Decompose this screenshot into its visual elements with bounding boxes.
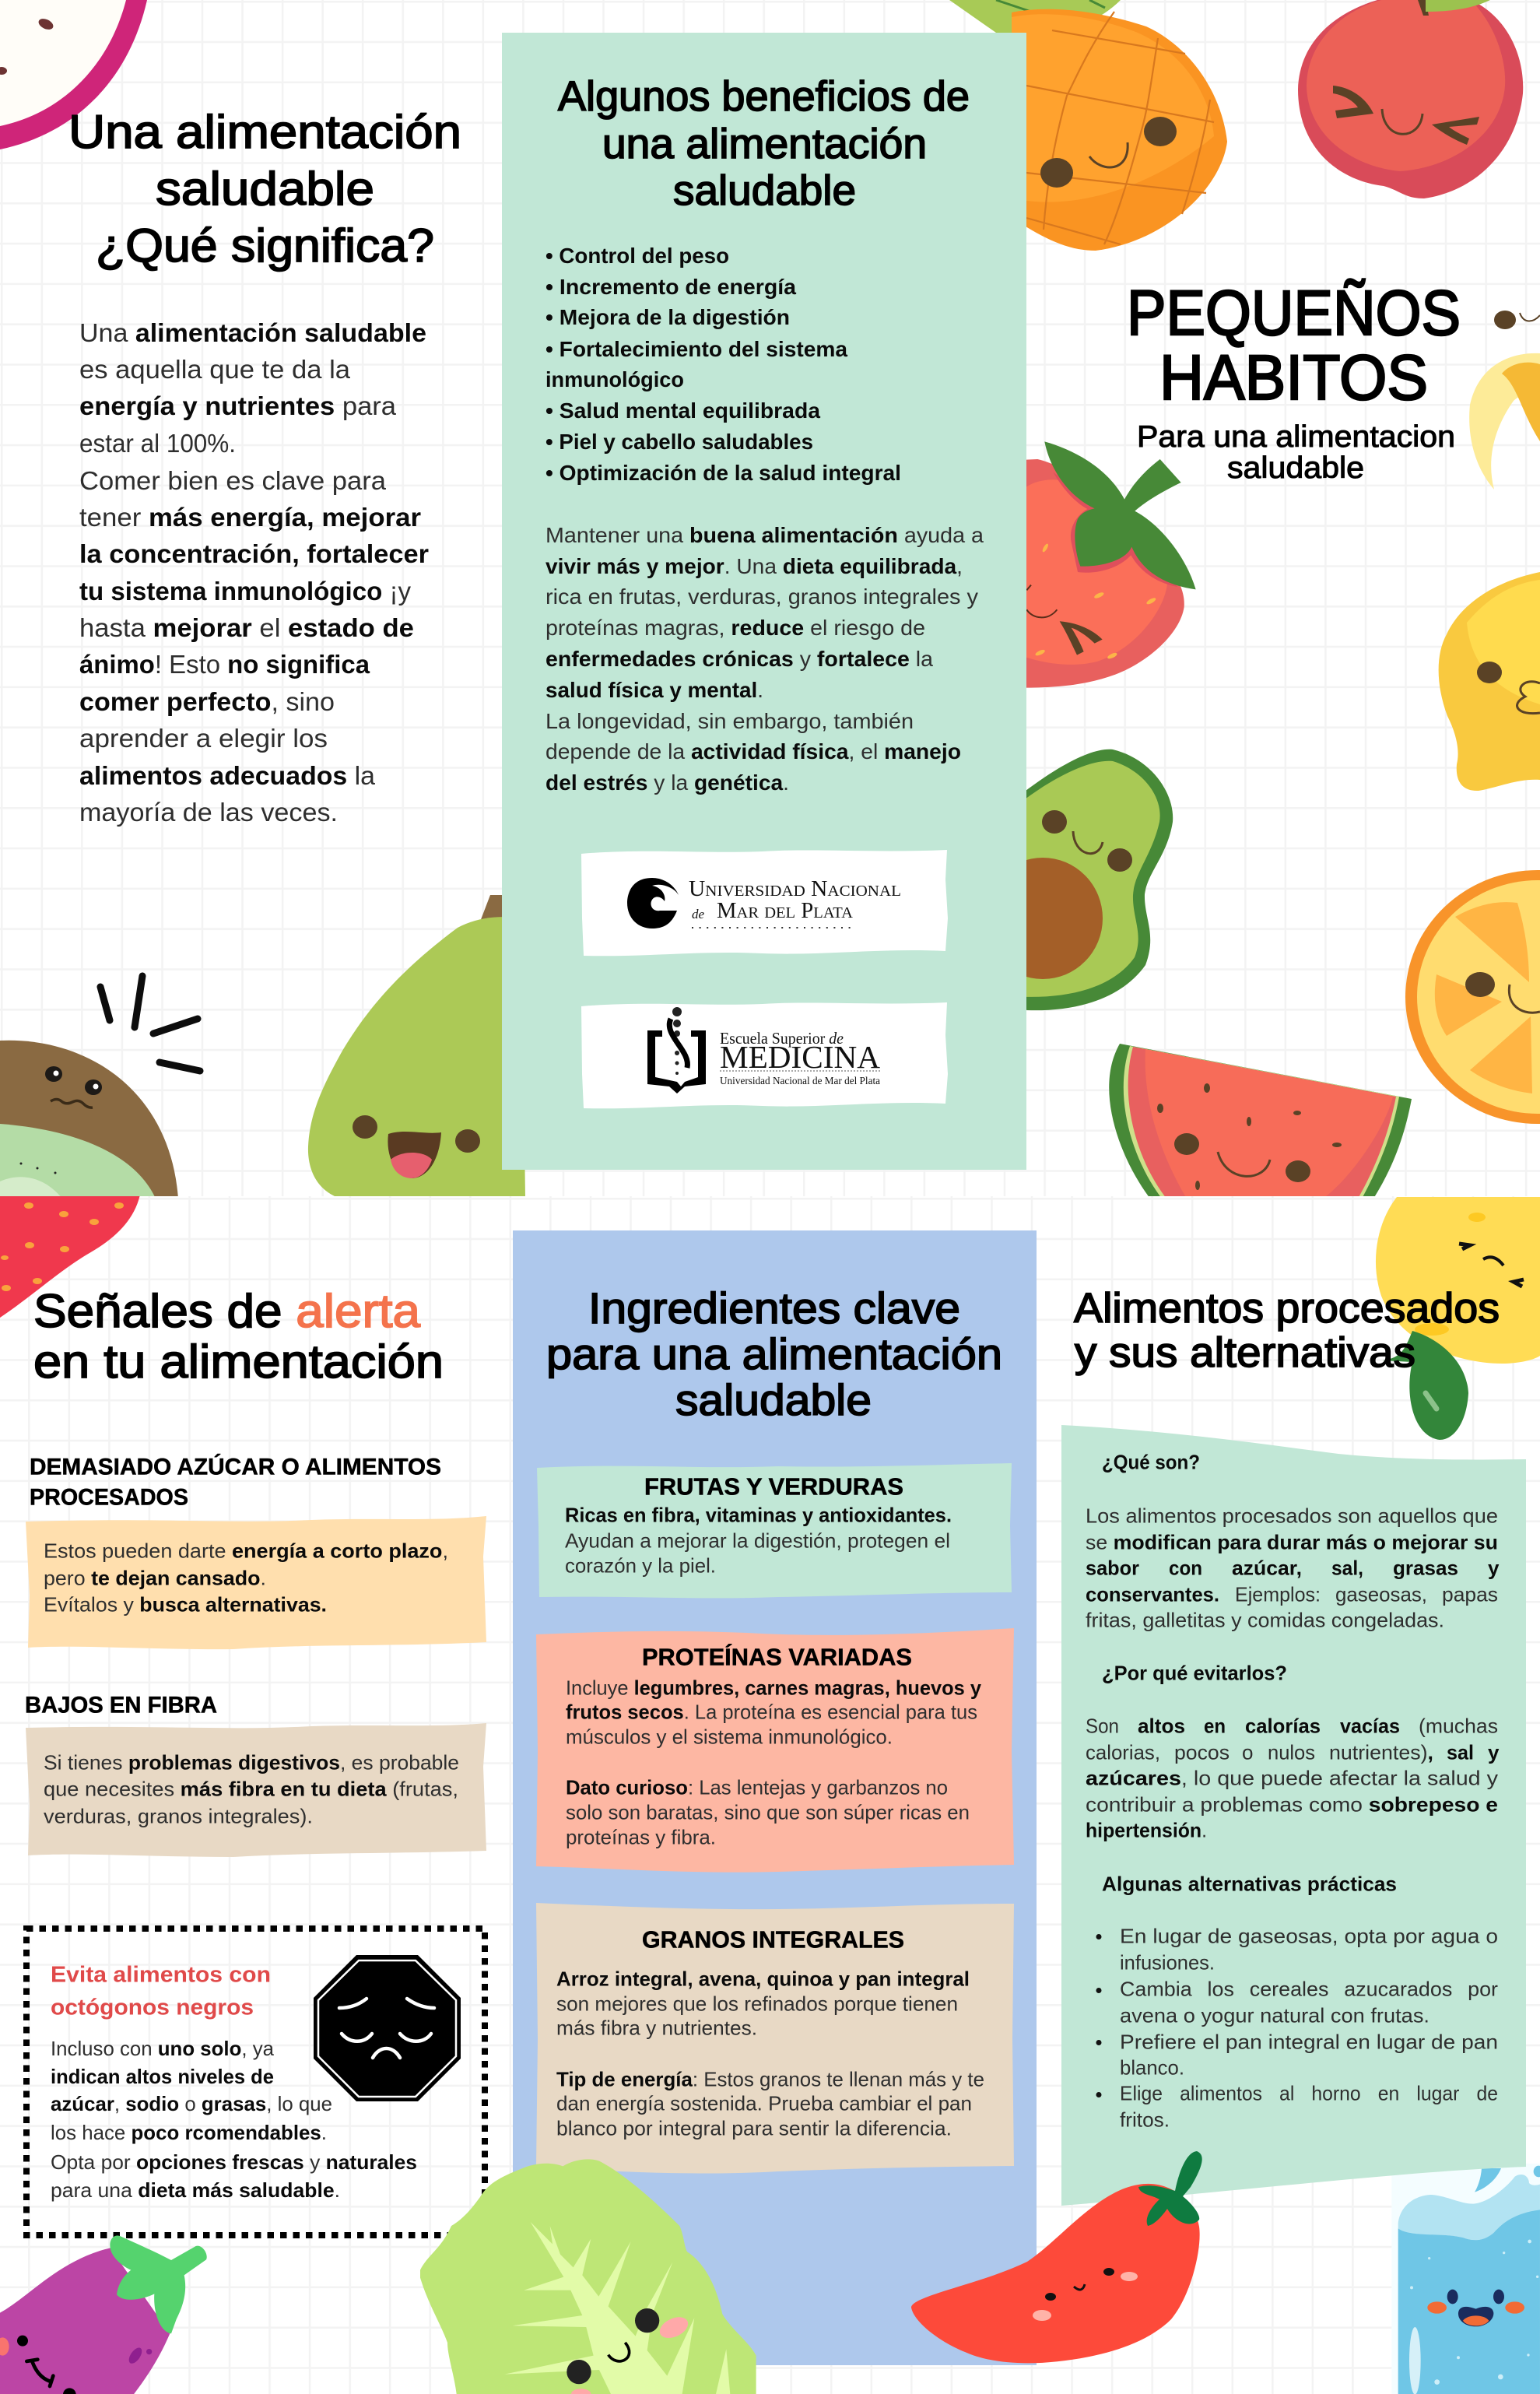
callout: fiber: que necesites más fibra en tu dieta (frutas, [44, 1778, 458, 1801]
list: benefits [545, 244, 901, 485]
icon: peeking face [1494, 311, 1540, 329]
text block: why avoid: hipertensión. [1086, 1818, 1207, 1841]
heading: benefits [558, 73, 970, 214]
text block: what are they: Los alimentos procesados son aquellos que [1086, 1504, 1498, 1527]
text block: why avoid: pocos [1174, 1740, 1230, 1764]
card: whole grains: Tip de energía: Estos granos te llenan más y te [556, 2067, 984, 2090]
icon: surprise lines [100, 976, 200, 1071]
icon: strawberry [1009, 441, 1196, 688]
text block: why avoid: y [1488, 1740, 1500, 1764]
heading: una alimentación saludable [68, 106, 461, 272]
callout: sugar [26, 1516, 486, 1649]
text block: what are they: se modifican para durar más o mejorar su [1086, 1530, 1498, 1553]
subheading: demasiado azúcar [30, 1454, 441, 1510]
text block: what are they: azúcar, [1232, 1557, 1302, 1580]
title: pequeños habitos [1127, 278, 1461, 485]
text block: why avoid: calorias, [1086, 1740, 1160, 1764]
card: whole grains: blanco por integral para sentir la diferencia. [556, 2117, 952, 2140]
subheading: demasiado azúcar: DEMASIADO AZÚCAR O ALIMENTOS [30, 1454, 441, 1480]
logo: Universidad Nacional de Mar del Plata: Mar del Plata [717, 899, 854, 923]
icon: banana [1469, 353, 1540, 490]
icon: chili pepper [911, 2151, 1202, 2363]
panel: benefits [502, 33, 1026, 1170]
subheading: what are they: ¿Qué son? [1102, 1451, 1200, 1474]
text block: why avoid: o [1242, 1740, 1253, 1764]
card: fruits and vegetables: Ayudan a mejorar la digestión, protegen el [565, 1529, 950, 1552]
callout: fiber [26, 1723, 486, 1857]
heading: benefits: Algunos beneficios de [558, 73, 970, 120]
icon: dragon fruit [0, 0, 147, 149]
icon: sad octagon [314, 1955, 461, 2101]
icon: apple [1298, 0, 1523, 198]
card: proteins: Incluye legumbres, carnes magras, huevos y [566, 1676, 982, 1700]
icon: watermelon [1109, 1044, 1412, 1199]
list: benefits: inmunológico [545, 367, 684, 391]
icon: lemon with leaf [1376, 1197, 1540, 1440]
text block: what are they: sal, [1331, 1557, 1363, 1580]
text block: definition: energía y nutrientes para [79, 391, 397, 420]
heading: key ingredients: Ingredientes clave [588, 1283, 960, 1332]
text block: benefits paragraph: salud física y mental. [545, 678, 763, 702]
text block: benefits paragraph: enfermedades crónicas y fortalece la [545, 647, 933, 671]
logo: Escuela Superior de Medicina [581, 1002, 948, 1108]
text block: what are they: conservantes. [1086, 1583, 1219, 1606]
icon: kiwi [0, 1041, 178, 1199]
warning heading: Evita alimentos con [51, 1963, 271, 1988]
card: fruits and vegetables: Ricas en fibra, vitaminas y antioxidantes. [565, 1504, 952, 1527]
text block: definition: tu sistema inmunológico ¡y [79, 577, 411, 606]
list: benefits: • Piel y cabello saludables [545, 430, 813, 454]
subheading: bajos en fibra: BAJOS EN FIBRA [25, 1692, 217, 1718]
warning text: indican altos niveles de [51, 2065, 274, 2088]
heading: una alimentación saludable: ¿Qué significa? [96, 219, 434, 272]
card: proteins: músculos y el sistema inmunológico. [566, 1725, 893, 1748]
list: alternatives: Cambia los cereales azucarados por [1120, 1977, 1498, 2000]
warning text: los hace poco rcomendables. [51, 2121, 327, 2144]
warning text: azúcar, sodio o grasas, lo que [51, 2092, 332, 2115]
list: alternatives: Prefiere el pan integral en lugar de pan [1120, 2030, 1498, 2053]
icon: lettuce [420, 2159, 756, 2394]
logo: Universidad Nacional de Mar del Plata: de [692, 907, 705, 921]
card: whole grains: GRANOS INTEGRALES [642, 1925, 904, 1953]
card: whole grains: son mejores que los refinados porque tienen [556, 1992, 958, 2016]
text block: why avoid: azúcares , lo que puede afectar la salud y [1086, 1767, 1498, 1790]
card: fruits and vegetables: corazón y la piel. [565, 1553, 716, 1577]
text block: benefits paragraph: del estrés y la genética. [545, 771, 789, 795]
text block: definition: comer perfecto, sino [79, 687, 335, 716]
icon: water glass [1391, 2164, 1540, 2394]
logo: Escuela Superior de Medicina: MEDICINA [720, 1039, 880, 1075]
list: alternatives [1096, 1924, 1498, 2131]
text block: what are they: papas [1442, 1583, 1498, 1606]
list: alternatives: infusiones. [1120, 1950, 1215, 1974]
subtitle: saludable [1227, 451, 1364, 485]
card: proteins: frutos secos. La proteína es esencial para tus [566, 1700, 977, 1723]
icon: pear [308, 895, 525, 1196]
text block: definition: es aquella que te da la [79, 355, 351, 384]
text block: why avoid: (muchas [1419, 1714, 1498, 1737]
text block: definition: tener más energía, mejorar [79, 503, 421, 532]
text block: what are they: con [1169, 1557, 1202, 1580]
card: fruits and vegetables: FRUTAS Y VERDURAS [644, 1473, 903, 1501]
title: pequeños habitos: PEQUEÑOS [1127, 278, 1461, 349]
subtitle: Para una alimentacion [1137, 420, 1455, 454]
text block: definition: alimentos adecuados la [79, 761, 376, 790]
logo: Escuela Superior de Medicina: Escuela Superior de [720, 1029, 844, 1048]
list: benefits: • Optimización de la salud integral [545, 461, 901, 485]
logo: Universidad Nacional de Mar del Plata [581, 850, 948, 956]
card: proteins: solo son baratas, sino que son súper ricas en [566, 1801, 970, 1824]
text block: what are they [1086, 1504, 1500, 1631]
text block: why avoid: contribuir a problemas como sobrepeso e [1086, 1793, 1498, 1817]
list: benefits: • Incremento de energía [545, 275, 796, 299]
callout: sugar: Evítalos y busca alternativas. [44, 1592, 327, 1616]
text block: why avoid: vacías [1340, 1714, 1400, 1737]
text block: benefits paragraph: Mantener una buena alimentación ayuda a [545, 523, 984, 547]
text block: definition: Comer bien es clave para [79, 466, 387, 495]
text block: definition: ánimo! Esto no significa [79, 650, 370, 679]
text block: definition: mayoría de las veces. [79, 798, 338, 827]
icon: avocado [1026, 749, 1173, 1010]
warning text: Incluso con uno solo, ya [51, 2037, 275, 2060]
panel: processed foods [1061, 1425, 1526, 2206]
text block: benefits paragraph [545, 523, 984, 795]
warning text [51, 2037, 417, 2202]
warning text: Opta por opciones frescas y naturales [51, 2150, 417, 2174]
list: benefits: • Mejora de la digestión [545, 305, 790, 329]
icon: lemon [1439, 572, 1540, 791]
heading: una alimentación saludable: saludable [156, 163, 374, 215]
callout: fiber: Si tienes problemas digestivos, es probable [44, 1751, 459, 1774]
text block: why avoid: Son [1086, 1714, 1119, 1737]
card: proteins: PROTEÍNAS VARIADAS [642, 1644, 912, 1670]
text block: what are they: y [1488, 1557, 1500, 1580]
text block: what are they: fritas, galletitas y comidas congeladas. [1086, 1608, 1444, 1631]
warning heading [51, 1963, 271, 2020]
list: alternatives: En lugar de gaseosas, opta por agua o [1120, 1924, 1498, 1947]
heading: key ingredients: para una alimentación [546, 1329, 1002, 1378]
heading: processed foods: Alimentos procesados [1074, 1285, 1500, 1332]
subheading: demasiado azúcar: PROCESADOS [30, 1485, 188, 1510]
card: fruits and vegetables [537, 1463, 1012, 1598]
list: alternatives: avena o yogur natural con frutas. [1120, 2003, 1429, 2027]
warning text: para una dieta más saludable. [51, 2178, 340, 2202]
text block: definition: hasta mejorar el estado de [79, 613, 414, 642]
heading: señales de alerta: en tu alimentación [33, 1336, 444, 1388]
text block: why avoid: en [1204, 1714, 1226, 1737]
logo: Universidad Nacional de Mar del Plata: Universidad Nacional [689, 877, 901, 901]
subheading: why avoid: ¿Por qué evitarlos? [1102, 1661, 1287, 1684]
text block: what are they: Ejemplos: [1235, 1583, 1321, 1606]
text block: why avoid: sal [1447, 1740, 1474, 1764]
list: alternatives: fritos. [1120, 2108, 1170, 2131]
icon: eggplant [0, 2235, 207, 2394]
title: pequeños habitos: HABITOS [1159, 342, 1428, 413]
heading: key ingredients: saludable [675, 1375, 872, 1424]
card: proteins: proteínas y fibra. [566, 1826, 716, 1849]
text block: benefits paragraph: La longevidad, sin embargo, también [545, 709, 914, 733]
text block: why avoid [1086, 1714, 1500, 1841]
warning heading: octógonos negros [51, 1996, 254, 2020]
subheading: alternatives: Algunas alternativas prácticas [1102, 1873, 1397, 1896]
text block: benefits paragraph: proteínas magras, reduce el riesgo de [545, 616, 925, 640]
card: whole grains: dan energía sostenida. Prueba cambiar el pan [556, 2092, 972, 2115]
card: proteins [536, 1628, 1014, 1873]
text block: what are they: grasas [1393, 1557, 1458, 1580]
list: benefits: • Salud mental equilibrada [545, 398, 820, 423]
text block: definition: estar al 100%. [79, 429, 236, 458]
heading: una alimentación saludable: Una alimentación [68, 106, 461, 158]
card: whole grains: Arroz integral, avena, quinoa y pan integral [556, 1968, 970, 1991]
heading: processed foods: y sus alternativas [1075, 1329, 1415, 1376]
text block: definition [79, 318, 429, 827]
logo: Escuela Superior de Medicina: Universidad Nacional de Mar del Plata [720, 1076, 881, 1087]
subtitle [1137, 420, 1455, 485]
callout: sugar: pero te dejan cansado. [44, 1566, 266, 1589]
text block: why avoid: nutrientes), [1329, 1740, 1433, 1764]
text block: why avoid: altos [1138, 1714, 1185, 1737]
text block: what are they: gaseosas, [1335, 1583, 1427, 1606]
panel: key ingredients [513, 1230, 1037, 2365]
card: whole grains: más fibra y nutrientes. [556, 2016, 757, 2039]
text block: benefits paragraph: vivir más y mejor. Una dieta equilibrada, [545, 554, 963, 578]
heading: processed foods [1074, 1285, 1500, 1376]
callout: black octagons warning [26, 1929, 485, 2235]
heading: benefits: saludable [673, 167, 856, 214]
callout: sugar: Estos pueden darte energía a corto plazo , [44, 1539, 448, 1563]
callout: fiber: verduras, granos integrales). [44, 1804, 313, 1827]
icon: pineapple [949, 0, 1227, 251]
heading: señales de alerta: Señales de alerta [33, 1285, 421, 1337]
icon: strawberry corner [0, 1191, 141, 1318]
heading: señales de alerta [33, 1285, 444, 1388]
text block: definition: aprender a elegir los [79, 724, 328, 753]
text block: why avoid: nulos [1268, 1740, 1315, 1764]
text block: definition: Una alimentación saludable [79, 318, 426, 347]
heading: key ingredients [546, 1283, 1002, 1424]
icon: orange slice [1405, 870, 1540, 1124]
text block: benefits paragraph: depende de la actividad física, el manejo [545, 739, 961, 763]
card: proteins: Dato curioso: Las lentejas y garbanzos no [566, 1776, 948, 1799]
list: alternatives: blanco. [1120, 2056, 1184, 2080]
list: benefits: • Control del peso [545, 244, 729, 268]
text block: what are they: sabor [1086, 1557, 1139, 1580]
list: alternatives: Elige alimentos al horno en lugar de [1120, 2081, 1498, 2104]
text block: benefits paragraph: rica en frutas, verduras, granos integrales y [545, 584, 978, 609]
list: benefits: • Fortalecimiento del sistema [545, 337, 847, 361]
card: whole grains [536, 1903, 1014, 2173]
text block: definition: la concentración, fortalecer [79, 539, 429, 568]
text block: why avoid: calorías [1245, 1714, 1321, 1737]
heading: benefits: una alimentación [602, 121, 927, 167]
